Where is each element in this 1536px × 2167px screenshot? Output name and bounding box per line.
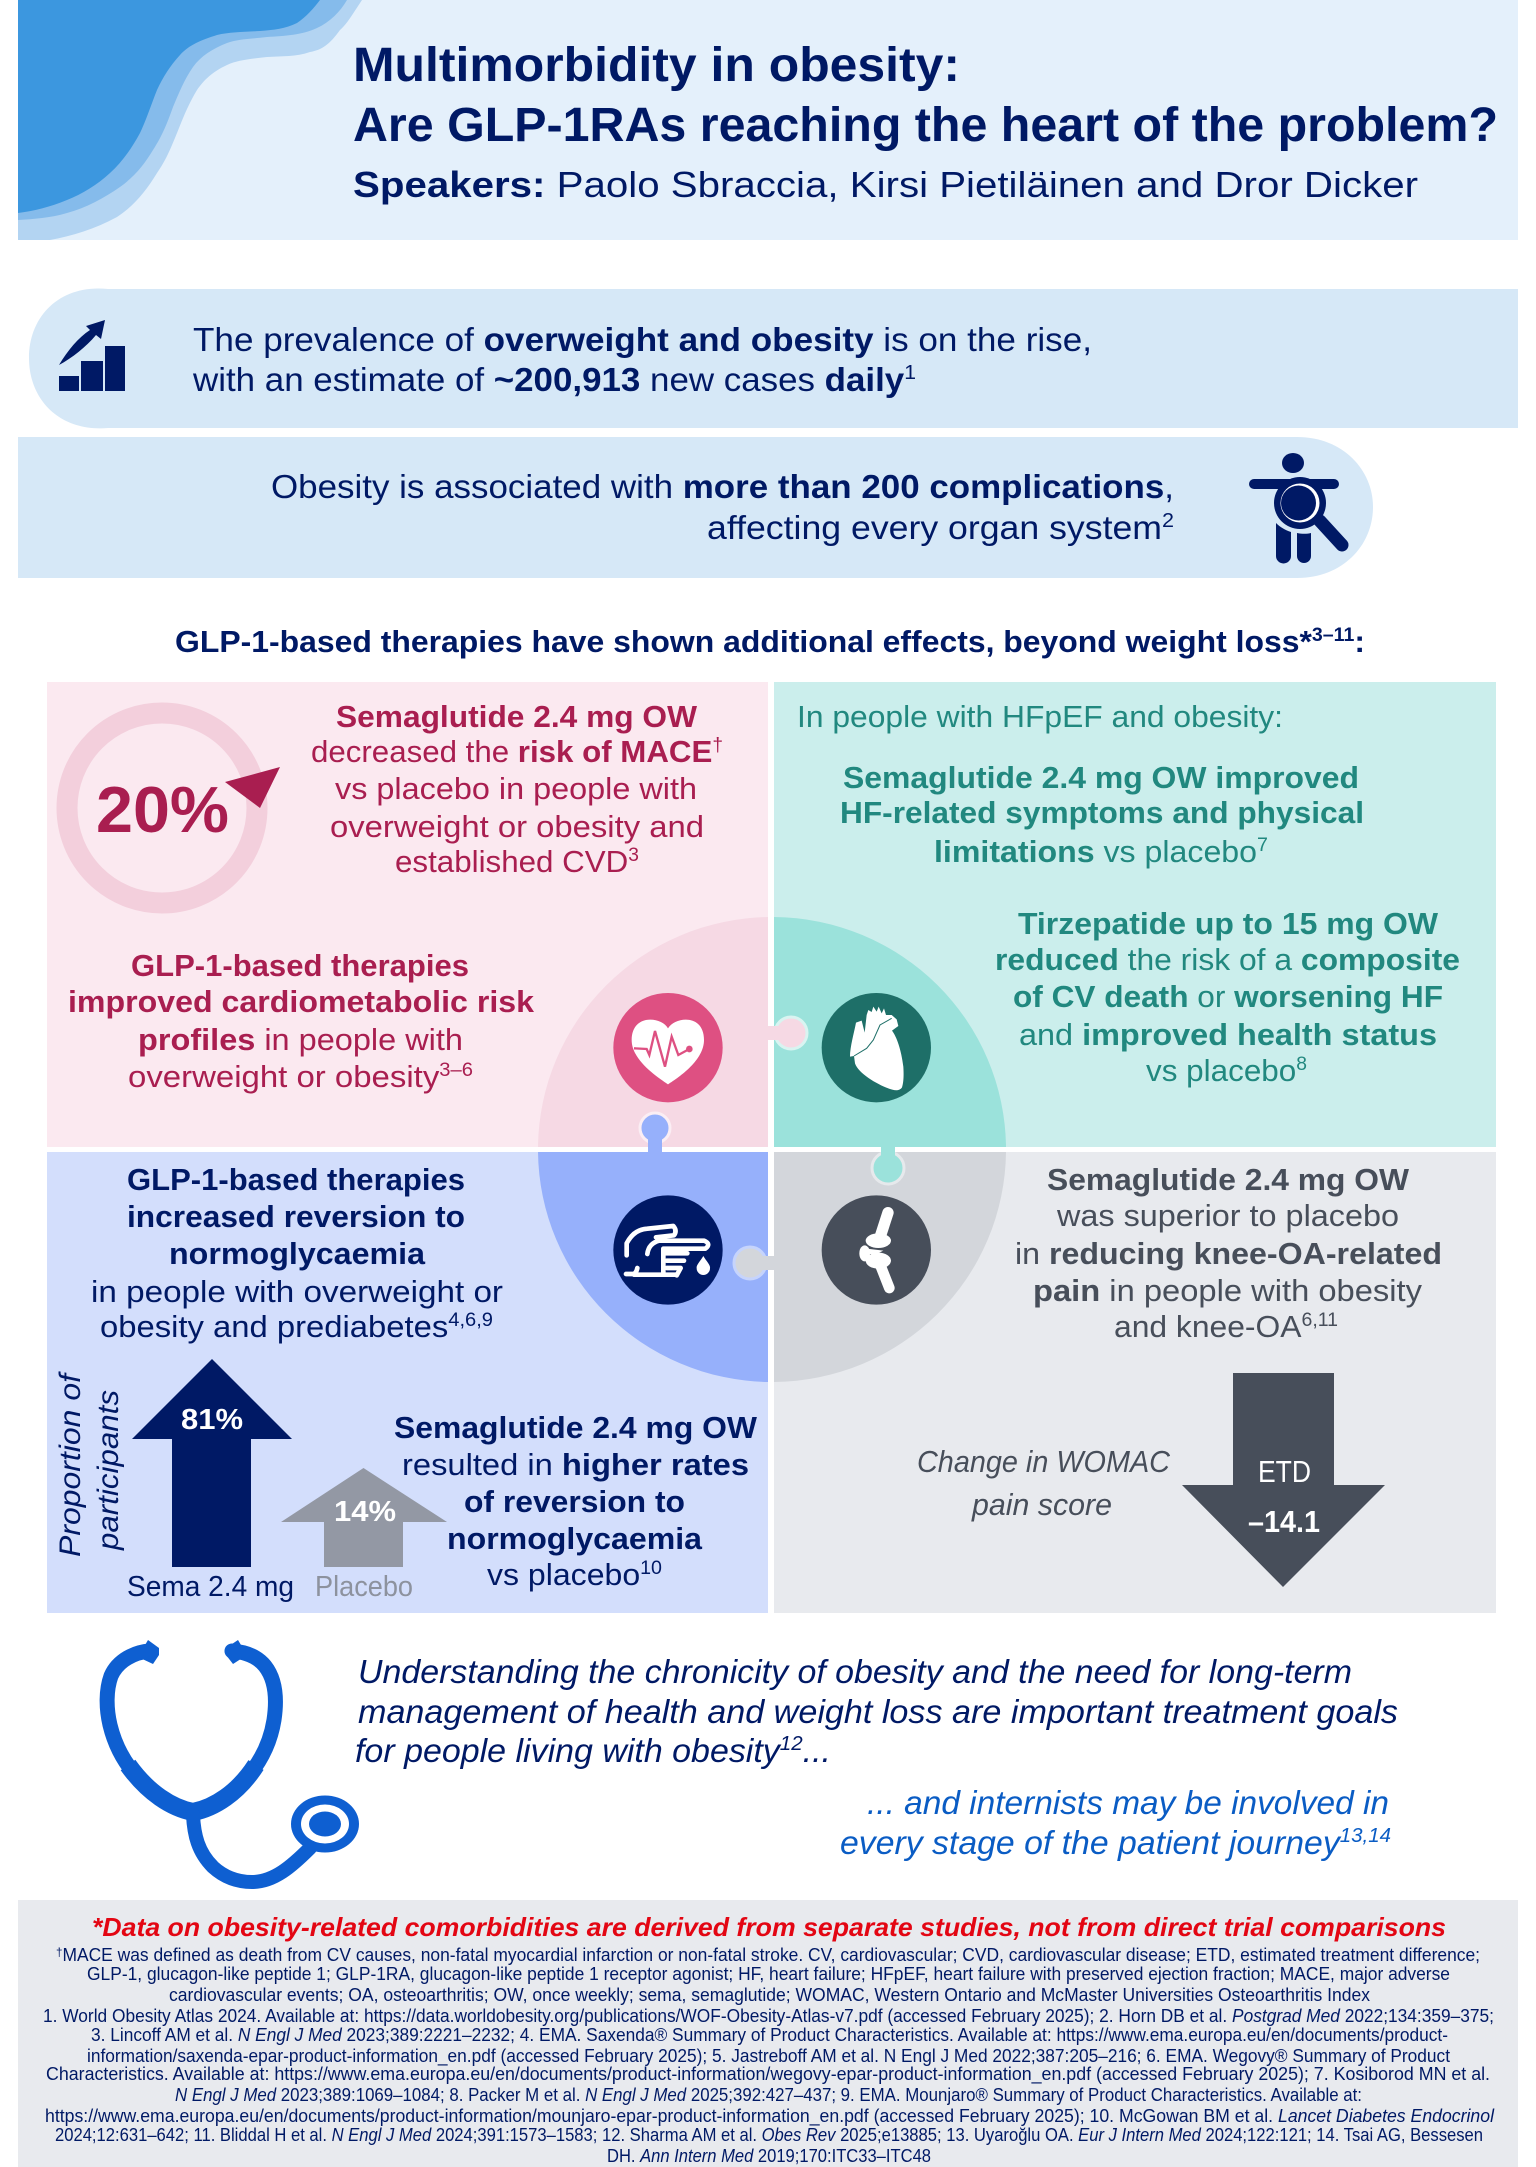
heading: additional effects: 3–11	[1312, 625, 1355, 646]
heading: additional effects: :	[1354, 624, 1365, 659]
header banner	[18, 0, 1518, 240]
text: cardiometabolic profiles: overweight or obesity	[128, 1059, 421, 1094]
references: DH. Ann Intern Med 2019;170:ITC33–ITC48	[607, 2146, 931, 2166]
text: knee OA pain	[1015, 1162, 1442, 1344]
references	[43, 2006, 1495, 2166]
icon: 20 percent ring	[67, 713, 280, 903]
title	[353, 39, 1498, 152]
axis label: proportion of participants	[54, 1371, 125, 1557]
header wave decoration	[18, 0, 362, 240]
text: chronicity statement: Understanding the chronicity of obesity and the need for long-term	[358, 1653, 1352, 1690]
text: prevalence: 1	[904, 362, 916, 384]
icon: 20 percent ring: 20%	[96, 773, 229, 846]
panel: knee osteoarthritis (grey)	[774, 1152, 1496, 1613]
text: MACE result: †	[712, 735, 723, 756]
text: knee OA pain: 6,11	[1301, 1310, 1338, 1331]
text: cardiometabolic profiles: 3–6	[439, 1060, 473, 1081]
references: Characteristics. Available at: https://www.ema.europa.eu/en/documents/product-information/wegovy-epar-product-information_en.pdf (accessed February 2025); 7. Kosiborod MN et al.	[46, 2064, 1490, 2085]
text: semaglutide HF symptoms: HF-related symptoms and physical	[840, 795, 1364, 830]
text: tirzepatide: 8	[1296, 1054, 1307, 1075]
arrow: sema 81 percent: 81%	[181, 1404, 243, 1436]
text: semaglutide HF symptoms: limitations vs placebo	[934, 834, 1251, 869]
bar label: placebo: Placebo	[315, 1571, 413, 1603]
text: MACE result: established CVD	[395, 844, 626, 879]
text: higher rates of reversion: of reversion to	[464, 1484, 685, 1519]
abbreviations: GLP-1, glucagon-like peptide 1; GLP-1RA, glucagon-like peptide 1 receptor agonist; HF, heart failure; HFpEF, heart failure with preserved ejection fraction; MACE, major adverse	[87, 1964, 1450, 1984]
text: reversion to normoglycaemia	[91, 1162, 503, 1344]
panel: complications	[18, 437, 1373, 578]
title: Multimorbidity in obesity:	[353, 39, 960, 92]
text: WOMAC label: pain score	[971, 1487, 1112, 1522]
icon: stethoscope	[107, 1640, 359, 1882]
speakers: Speakers: Paolo Sbraccia, Kirsi Pietiläinen and Dror Dicker	[353, 164, 1418, 205]
axis label: proportion of participants: Proportion of	[54, 1371, 87, 1557]
icon: anatomical heart	[822, 993, 931, 1102]
text: reversion to normoglycaemia: GLP-1-based therapies	[127, 1162, 465, 1197]
text: complications: affecting every organ system	[707, 509, 1128, 546]
text: cardiometabolic profiles	[68, 948, 535, 1094]
text: tirzepatide: and improved health status	[1019, 1017, 1437, 1052]
text: tirzepatide: of CV death or worsening HF	[1013, 979, 1443, 1014]
text: internists statement: every stage of the patient journey	[840, 1824, 1328, 1861]
abbreviations	[56, 1945, 1480, 2005]
text: tirzepatide: vs placebo	[1146, 1053, 1294, 1088]
panel: normoglycaemia (blue)	[47, 1152, 768, 1613]
text: reversion to normoglycaemia: 4,6,9	[448, 1310, 493, 1331]
text: reversion to normoglycaemia: normoglycaemia	[169, 1236, 426, 1271]
abbreviations: MACE was defined as death from CV causes, non-fatal myocardial infarction or non-fatal stroke. CV, cardiovascular; CVD, cardiovascular disease; ETD, estimated treatment difference;	[62, 1945, 1480, 1965]
text: complications: Obesity is associated with more than 200 complications ,	[271, 468, 1174, 505]
title: Are GLP-1RAs reaching the heart of the problem?	[353, 99, 1498, 152]
icon: knee joint	[822, 1195, 931, 1305]
axis label: proportion of participants: participants	[92, 1390, 125, 1551]
text: prevalence	[192, 321, 1092, 398]
text: knee OA pain: Semaglutide 2.4 mg OW	[1047, 1162, 1410, 1197]
text: reversion to normoglycaemia: obesity and prediabetes	[100, 1309, 429, 1344]
text: semaglutide HF symptoms: 7	[1257, 835, 1268, 856]
references: https://www.ema.europa.eu/en/documents/product-information/mounjaro-epar-product-information_en.pdf (accessed February 2025); 10. McGowan BM et al. Lancet Diabetes Endocrinol	[45, 2106, 1495, 2127]
text: MACE result: overweight or obesity and	[330, 809, 704, 844]
text: semaglutide HF symptoms	[840, 760, 1364, 869]
heading: additional effects: GLP-1-based therapies have shown additional effects, beyond weight loss*	[175, 624, 1279, 659]
text: WOMAC label: Change in WOMAC	[917, 1444, 1171, 1479]
references: 1. World Obesity Atlas 2024. Available at: https://data.worldobesity.org/publications/WOF-Obesity-Atlas-v7.pdf (accessed February 2025); 2. Horn DB et al. Postgrad Med 2022;134:359–375;	[43, 2006, 1494, 2026]
bar label: sema: Sema 2.4 mg	[127, 1571, 294, 1603]
references: N Engl J Med 2023;389:1069–1084; 8. Packer M et al. N Engl J Med 2025;392:427–437; 9. EMA. Mounjaro® Summary of Product Characteristics. Available at:	[175, 2085, 1362, 2105]
text: tirzepatide: Tirzepatide up to 15 mg OW	[1018, 906, 1439, 941]
text: chronicity statement: for people living with obesity	[355, 1732, 768, 1769]
text: semaglutide HF symptoms: Semaglutide 2.4 mg OW improved	[843, 760, 1359, 795]
arrow: ETD -14.1: ETD	[1258, 1454, 1311, 1489]
text: higher rates of reversion	[394, 1410, 758, 1592]
arrow: ETD -14.1: –14.1	[1248, 1504, 1320, 1539]
text: knee OA pain: and knee-OA	[1114, 1309, 1297, 1344]
text: MACE result: 3	[628, 845, 639, 866]
text: tirzepatide: reduced the risk of a composite	[995, 942, 1460, 977]
arrow: sema 81 percent	[132, 1359, 292, 1567]
text: internists statement: 13,14	[1340, 1825, 1391, 1847]
text: knee OA pain: pain in people with obesity	[1033, 1273, 1423, 1308]
text: WOMAC label	[917, 1444, 1171, 1522]
icon: heart with ECG	[613, 993, 723, 1102]
arrow: placebo 14 percent	[281, 1468, 447, 1567]
panel: heart failure (teal)	[774, 682, 1496, 1147]
text: complications	[271, 468, 1174, 546]
text: MACE result: decreased the risk of MACE	[311, 734, 711, 769]
references: 2024;12:631–642; 11. Bliddal H et al. N Engl J Med 2024;391:1573–1583; 12. Sharma AM et al. Obes Rev 2025;e13885; 13. Uyaroğlu OA. Eur J Intern Med 2024;122:121; 14. Tsai AG, Bessesen	[55, 2125, 1483, 2145]
text: knee OA pain: was superior to placebo	[1056, 1198, 1399, 1233]
text: internists statement: ... and internists may be involved in	[867, 1784, 1389, 1821]
text: prevalence: with an estimate of ~200,913 new cases daily	[193, 361, 900, 398]
abbreviations: cardiovascular events; OA, osteoarthritis; OW, once weekly; sema, semaglutide; WOMAC, Western Ontario and McMaster Universities Osteoarthritis Index	[169, 1985, 1370, 2005]
text: chronicity statement: ...	[803, 1732, 831, 1769]
text: chronicity statement	[355, 1653, 1398, 1769]
panel: prevalence	[29, 288, 1518, 428]
text: reversion to normoglycaemia: in people with overweight or	[91, 1274, 503, 1309]
text: higher rates of reversion: resulted in higher rates	[402, 1447, 749, 1482]
text: cardiometabolic profiles: GLP-1-based therapies	[131, 948, 469, 983]
text: cardiometabolic profiles: improved cardiometabolic risk	[68, 984, 535, 1019]
references: 3. Lincoff AM et al. N Engl J Med 2023;389:2221–2232; 4. EMA. Saxenda® Summary of Product Characteristics. Available at: https://www.ema.europa.eu/en/documents/product-	[91, 2025, 1448, 2045]
references: information/saxenda-epar-product-information_en.pdf (accessed February 2025); 5. Jastreboff AM et al. N Engl J Med 2022;387:205–216; 6. EMA. Wegovy® Summary of Product	[87, 2046, 1450, 2067]
icon: person with magnifier	[1249, 453, 1342, 564]
text: cardiometabolic profiles: profiles in people with	[138, 1022, 463, 1057]
footnote: data caveat: *Data on obesity-related comorbidities are derived from separate studies, not from direct trial comparisons	[92, 1912, 1446, 1942]
panel: cardiometabolic (pink)	[47, 682, 768, 1147]
icon: rising bar chart	[59, 320, 125, 391]
text: internists statement	[840, 1784, 1391, 1861]
text: MACE result: Semaglutide 2.4 mg OW	[336, 699, 698, 734]
text: higher rates of reversion: Semaglutide 2.4 mg OW	[394, 1410, 758, 1445]
text: knee OA pain: in reducing knee-OA-related	[1015, 1236, 1442, 1271]
text: higher rates of reversion: normoglycaemia	[447, 1521, 703, 1556]
arrow: ETD -14.1	[1182, 1373, 1385, 1587]
text: reversion to normoglycaemia: increased reversion to	[127, 1199, 465, 1234]
abbreviations: †	[56, 1945, 62, 1959]
arrow: placebo 14 percent: 14%	[334, 1496, 396, 1528]
panel: footer	[18, 1900, 1518, 2167]
icon: finger prick glucose	[613, 1195, 723, 1305]
text: MACE result	[311, 699, 723, 879]
text: chronicity statement: management of health and weight loss are important treatment goals	[358, 1693, 1398, 1730]
text: prevalence: The prevalence of overweight and obesity is on the rise,	[193, 321, 1092, 358]
text: chronicity statement: 12	[780, 1733, 803, 1755]
puzzle connectors	[640, 1017, 904, 1279]
text: MACE result: vs placebo in people with	[335, 771, 697, 806]
text: complications: 2	[1162, 510, 1174, 532]
text: tirzepatide	[995, 906, 1460, 1088]
text: HFpEF intro: In people with HFpEF and obesity:	[797, 699, 1283, 734]
text: higher rates of reversion: 10	[640, 1558, 662, 1579]
text: higher rates of reversion: vs placebo	[487, 1557, 635, 1592]
